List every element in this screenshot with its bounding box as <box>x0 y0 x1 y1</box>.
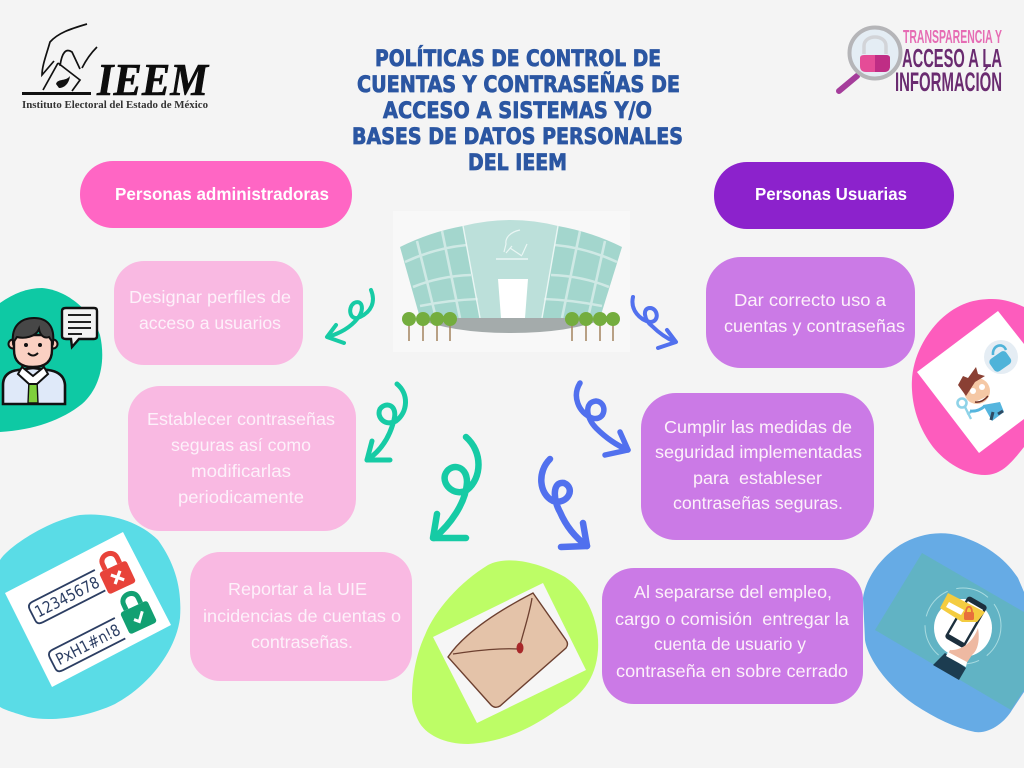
panel: Designar perfiles <box>114 261 303 365</box>
panel: Designar perfiles: acceso a usuarios <box>139 313 281 333</box>
panel: Cumplir las medidas: para estableser <box>693 468 822 488</box>
heading: Personas Usuarias: Personas Usuarias <box>755 184 907 204</box>
title: POLÍTICAS DE CONTROL DE <box>375 46 661 72</box>
title: CUENTAS Y CONTRASEÑAS DE <box>357 72 680 98</box>
illustration: IEEM building <box>393 211 630 352</box>
illustration: envelope on lime blob <box>412 560 598 744</box>
panel: Dar correcto uso <box>706 257 915 368</box>
heading: Personas Usuarias <box>714 162 954 229</box>
title: DEL IEEM <box>468 151 567 176</box>
illustration: phone on blue blob <box>863 533 1024 732</box>
heading: Personas administradoras: Personas administradoras <box>115 184 329 204</box>
arrow: green bottom <box>433 437 478 538</box>
illustration: passwords on cyan blob: PxH1#n!8 <box>53 620 124 669</box>
panel: Establecer contraseñas <box>128 386 356 531</box>
panel: Establecer contraseñas: periodicamente <box>178 487 304 507</box>
panel: Al separarse del empleo: cuenta de usuario y <box>654 634 806 654</box>
illustration: passwords on cyan blob: 12345678 <box>32 573 103 621</box>
arrow: green middle <box>367 384 406 460</box>
title: BASES DE DATOS PERSONALES <box>352 125 683 150</box>
panel: Dar correcto uso: Dar correcto uso a <box>734 290 886 310</box>
heading: Personas administradoras <box>80 161 352 228</box>
logo: Transparencia y acceso a la información <box>839 27 1002 97</box>
arrow: blue top <box>632 297 676 348</box>
logo: IEEM <box>22 24 210 111</box>
panel: Cumplir las medidas: seguridad implementadas <box>655 442 862 462</box>
panel: Al separarse del empleo <box>602 568 863 704</box>
arrow: green top <box>327 290 373 343</box>
illustration: administrator on green blob <box>0 288 102 432</box>
panel: Establecer contraseñas: seguras así como <box>171 435 311 455</box>
panel: Cumplir las medidas: contraseñas seguras. <box>673 493 843 513</box>
illustration: passwords on cyan blob <box>0 514 180 719</box>
panel: Reportar a la UIE: incidencias de cuentas o <box>203 606 401 626</box>
panel: Cumplir las medidas: Cumplir las medidas de <box>664 417 852 437</box>
panel: Designar perfiles: Designar perfiles de <box>129 287 291 307</box>
arrow: blue middle <box>576 383 628 455</box>
title <box>352 46 683 176</box>
panel: Reportar a la UIE: Reportar a la UIE <box>228 579 367 599</box>
panel: Al separarse del empleo: contraseña en sobre cerrado <box>616 661 848 681</box>
panel: Cumplir las medidas <box>641 393 874 540</box>
panel: Establecer contraseñas: Establecer contraseñas <box>147 409 335 429</box>
panel: Al separarse del empleo: Al separarse del empleo, <box>634 582 832 602</box>
illustration: man with key on pink blob <box>912 299 1024 475</box>
title: ACCESO A SISTEMAS Y/O <box>383 99 652 124</box>
panel: Reportar a la UIE <box>190 552 412 681</box>
arrow: blue bottom <box>541 459 587 547</box>
logo: IEEM: Instituto Electoral del Estado de México <box>22 99 208 111</box>
logo: IEEM: IEEM <box>96 54 210 105</box>
panel: Establecer contraseñas: modificarlas <box>191 461 291 481</box>
panel: Dar correcto uso: cuentas y contraseñas <box>724 316 905 336</box>
panel: Reportar a la UIE: contraseñas. <box>251 632 353 652</box>
panel: Al separarse del empleo: cargo o comisión entregar la <box>615 609 849 629</box>
